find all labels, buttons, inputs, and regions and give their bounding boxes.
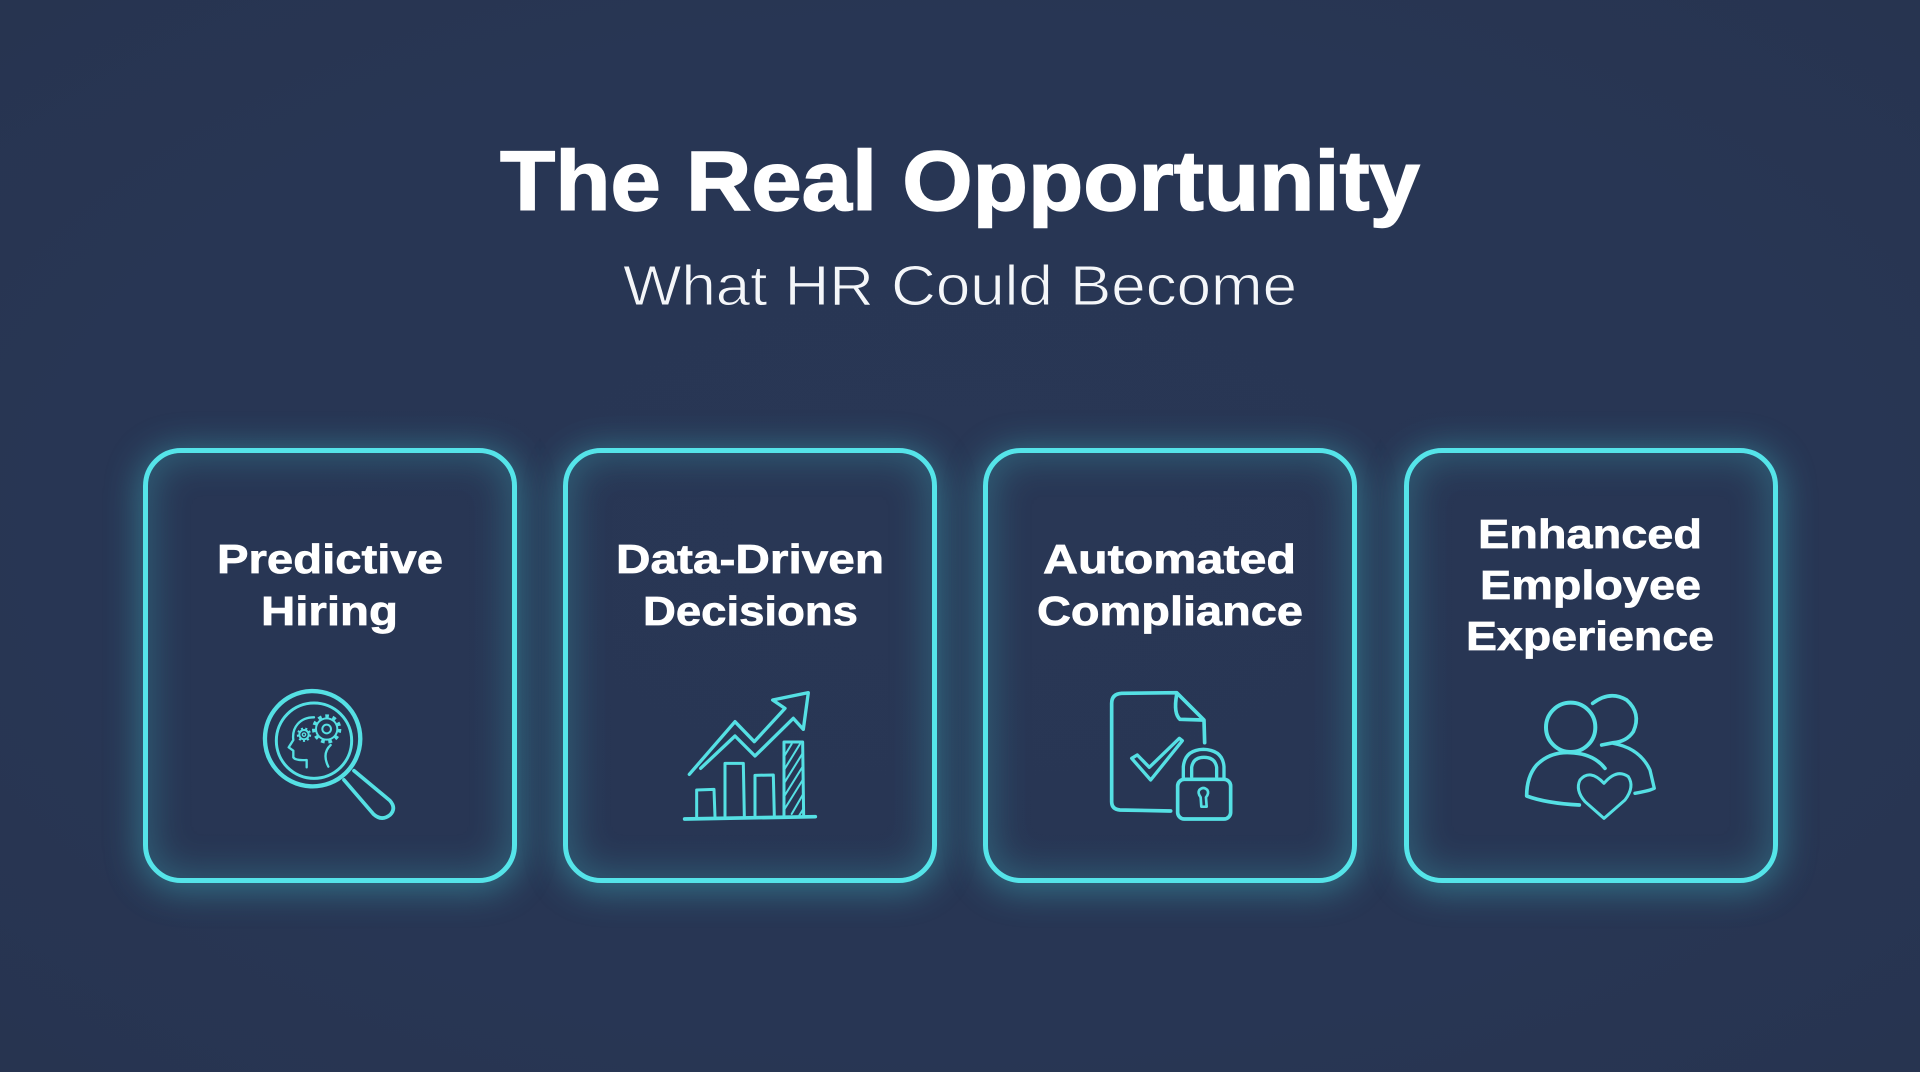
heading: Compliance	[1036, 588, 1302, 634]
heading: Data-Driven	[616, 536, 884, 582]
icon: magnifying glass with head and gears	[264, 691, 393, 818]
panel: Predictive Hiring	[143, 448, 517, 883]
heading: Enhanced	[1478, 510, 1702, 556]
icon: document with check and padlock	[1111, 692, 1230, 818]
heading: Experience	[1466, 612, 1714, 658]
title: The Real Opportunity	[500, 134, 1420, 228]
title block	[500, 134, 1420, 318]
heading: Decisions	[642, 588, 858, 634]
panel: Enhanced Employee Experience	[1404, 448, 1778, 883]
subtitle: What HR Could Become	[623, 254, 1297, 318]
heading: Predictive	[216, 536, 442, 582]
icon: two people with heart	[1526, 695, 1654, 818]
heading: Hiring	[260, 588, 398, 634]
icon: rising bar chart with arrow	[684, 692, 815, 818]
heading	[1466, 510, 1714, 658]
heading: Employee	[1480, 562, 1700, 608]
heading	[616, 536, 884, 634]
panel: Automated Compliance	[983, 448, 1357, 883]
heading	[216, 536, 442, 634]
panel: Data-Driven Decisions	[563, 448, 937, 883]
heading: Automated	[1042, 536, 1296, 582]
heading	[1036, 536, 1302, 634]
